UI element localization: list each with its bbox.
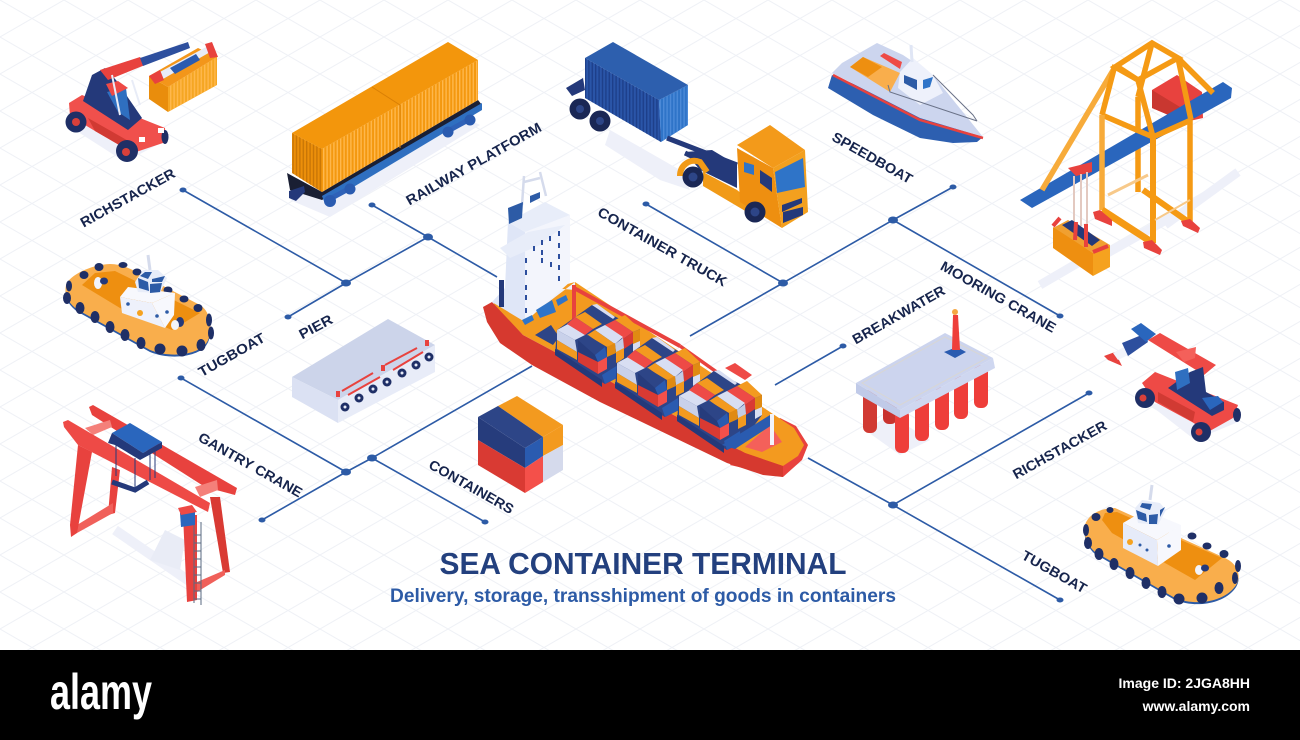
icon: tugboat right xyxy=(1083,485,1241,604)
label: pier: PIER xyxy=(296,311,335,342)
footer url: www.alamy.com xyxy=(1142,698,1250,714)
icon: tugboat left xyxy=(63,255,214,357)
title: SEA CONTAINER TERMINAL xyxy=(440,546,846,581)
label: containers: CONTAINERS xyxy=(426,456,517,517)
label: container truck: CONTAINER TRUCK xyxy=(595,204,730,290)
icon: gantry crane xyxy=(63,405,237,605)
superstructure xyxy=(492,172,575,325)
footer logo: alamy xyxy=(50,664,152,720)
label: gantry crane: GANTRY CRANE xyxy=(196,429,305,500)
footer bar xyxy=(0,650,1300,740)
icon: railway platform xyxy=(287,42,482,217)
icon: container truck xyxy=(566,42,808,228)
icon: mooring crane xyxy=(1020,43,1238,285)
icon: container ship xyxy=(483,172,808,477)
icon: speedboat xyxy=(828,43,983,143)
footer image id: Image ID: 2JGA8HH xyxy=(1119,675,1250,691)
icon: breakwater xyxy=(856,309,995,455)
label: tugboat right: TUGBOAT xyxy=(1019,547,1090,597)
label: breakwater: BREAKWATER xyxy=(849,282,948,347)
icon: pier xyxy=(292,319,435,423)
icon: containers xyxy=(478,396,563,493)
subtitle: Delivery, storage, transshipment of goods in containers xyxy=(390,586,896,607)
label: mooring crane: MOORING CRANE xyxy=(938,258,1059,336)
icon: richstacker top left xyxy=(66,42,218,162)
label: richstacker top left: RICHSTACKER xyxy=(77,165,178,230)
label: richstacker right: RICHSTACKER xyxy=(1010,417,1109,482)
connector lines xyxy=(178,184,1092,602)
label: speedboat: SPEEDBOAT xyxy=(829,129,916,187)
icon: richstacker right xyxy=(1104,323,1241,442)
label: railway platform: RAILWAY PLATFORM xyxy=(403,119,544,208)
label: tugboat left: TUGBOAT xyxy=(195,329,268,380)
